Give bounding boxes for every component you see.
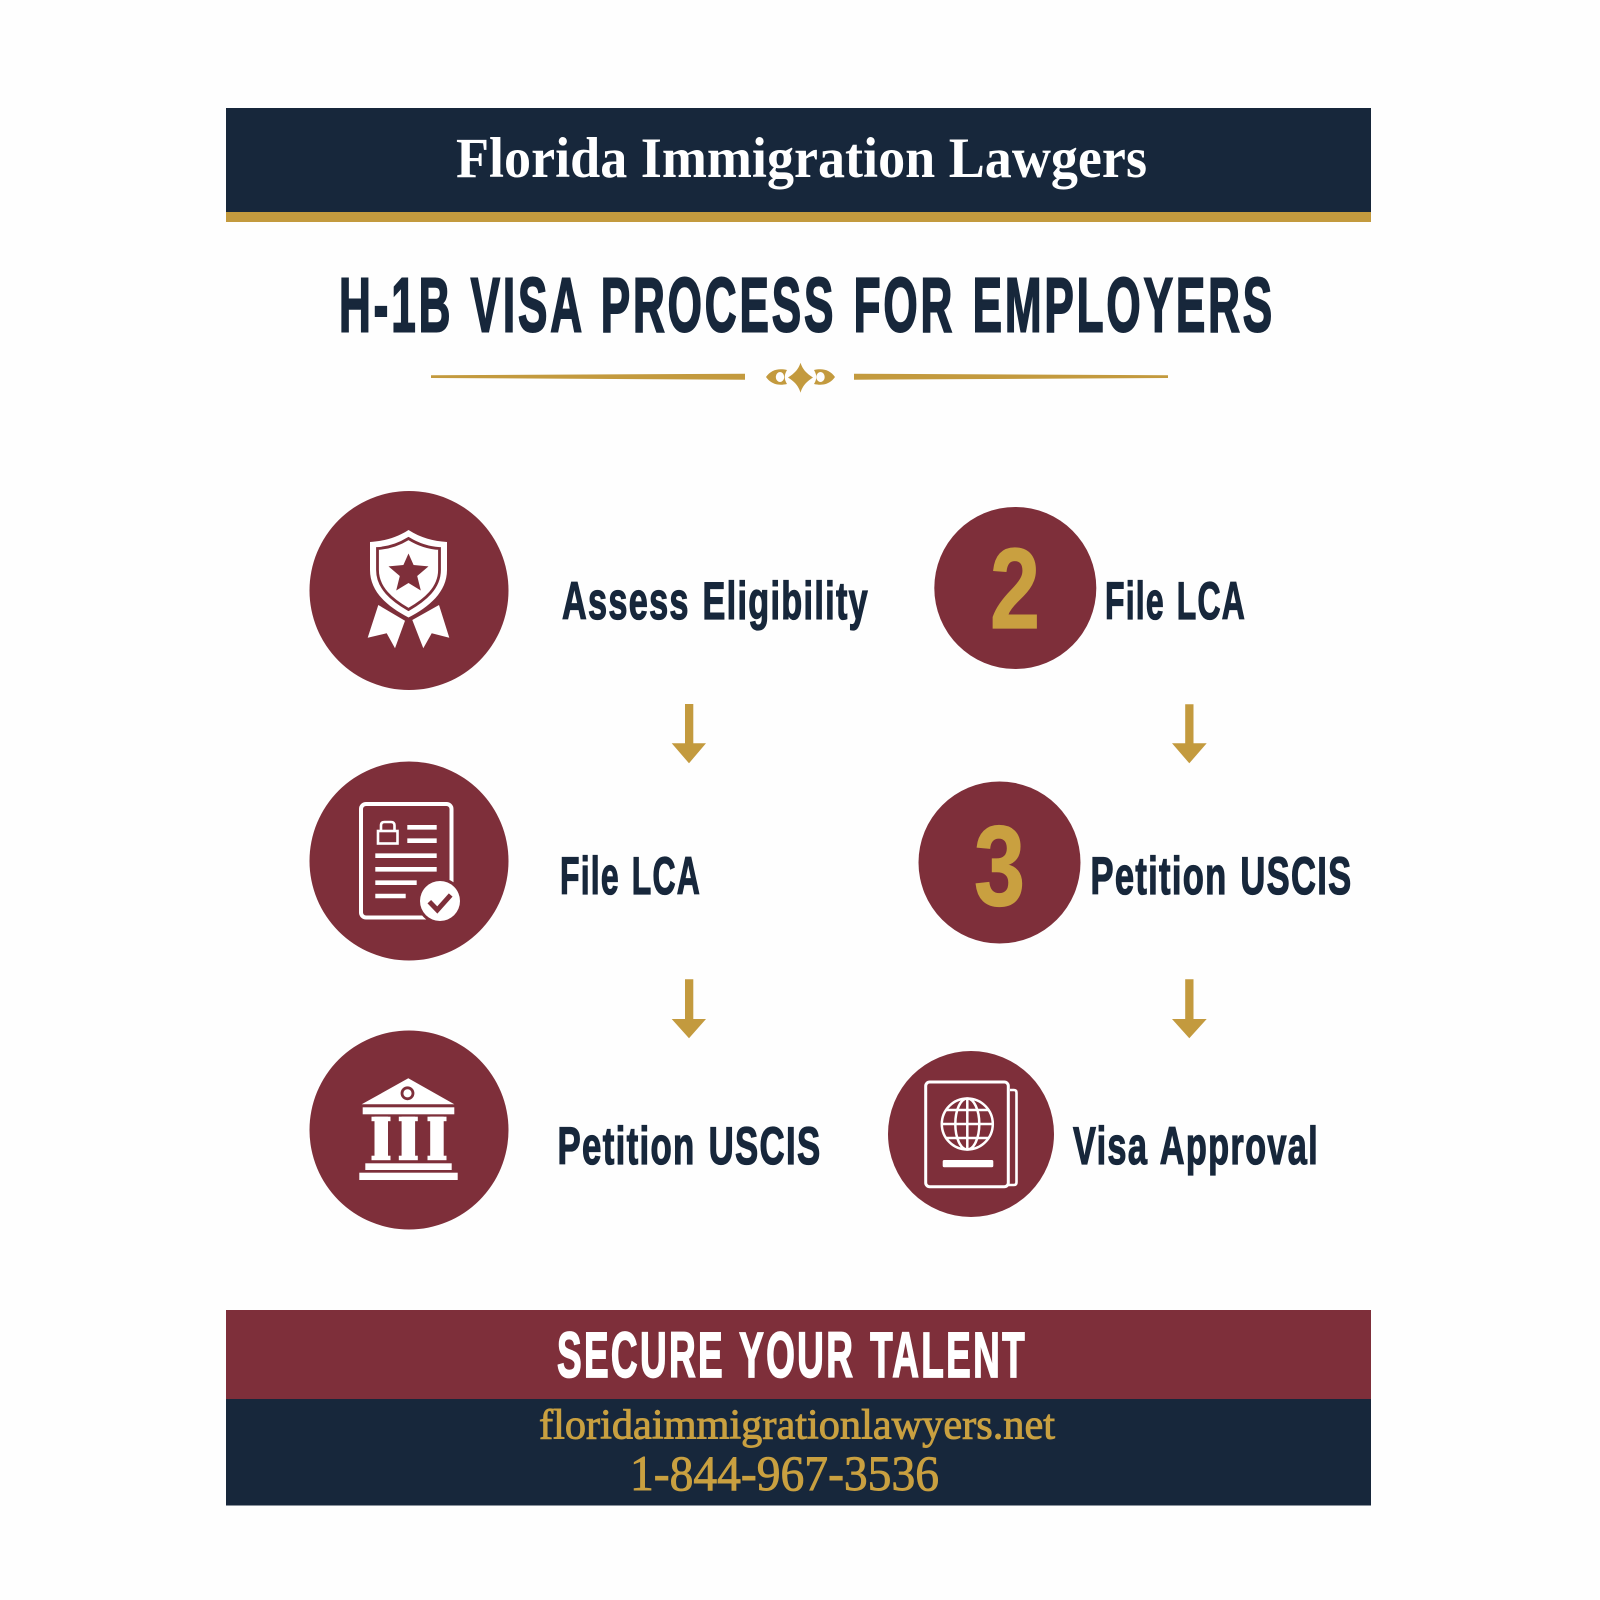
arrow <box>1172 704 1207 763</box>
phone number: 1-844-967-3536 <box>630 1445 939 1501</box>
circle badge with passport icon <box>888 1051 1054 1217</box>
arrow <box>1172 979 1207 1038</box>
label: Petition USCIS <box>558 1117 822 1176</box>
header banner <box>226 108 1371 222</box>
step: petition USCIS (left) <box>310 1030 822 1230</box>
title divider ornament <box>431 363 1168 393</box>
numbered circle <box>918 782 1080 944</box>
step: file LCA (left) <box>310 762 701 960</box>
firm name: Florida Immigration Lawgers <box>456 127 1147 190</box>
numbered circle: 2 <box>990 526 1040 653</box>
website: floridaimmigrationlawyers.net <box>539 1402 1055 1448</box>
footer contact band <box>226 1399 1371 1506</box>
footer call to action band <box>226 1310 1371 1399</box>
step: number 2 file LCA <box>934 507 1246 669</box>
step: visa approval <box>888 1051 1319 1217</box>
numbered circle: 3 <box>974 803 1025 930</box>
circle badge with document icon <box>310 762 508 960</box>
circle badge with courthouse icon <box>310 1030 508 1230</box>
label: File LCA <box>1105 572 1246 631</box>
step: number 3 petition USCIS <box>918 782 1352 944</box>
label: Petition USCIS <box>1090 847 1352 906</box>
arrow <box>672 979 706 1038</box>
label: Visa Approval <box>1073 1117 1319 1176</box>
call to action text: SECURE YOUR TALENT <box>557 1319 1027 1391</box>
arrow <box>672 704 706 763</box>
step: assess eligibility <box>310 491 869 690</box>
circle badge with shield icon <box>310 491 508 690</box>
label: Assess Eligibility <box>562 572 869 631</box>
label: File LCA <box>560 847 701 906</box>
numbered circle <box>934 507 1096 669</box>
